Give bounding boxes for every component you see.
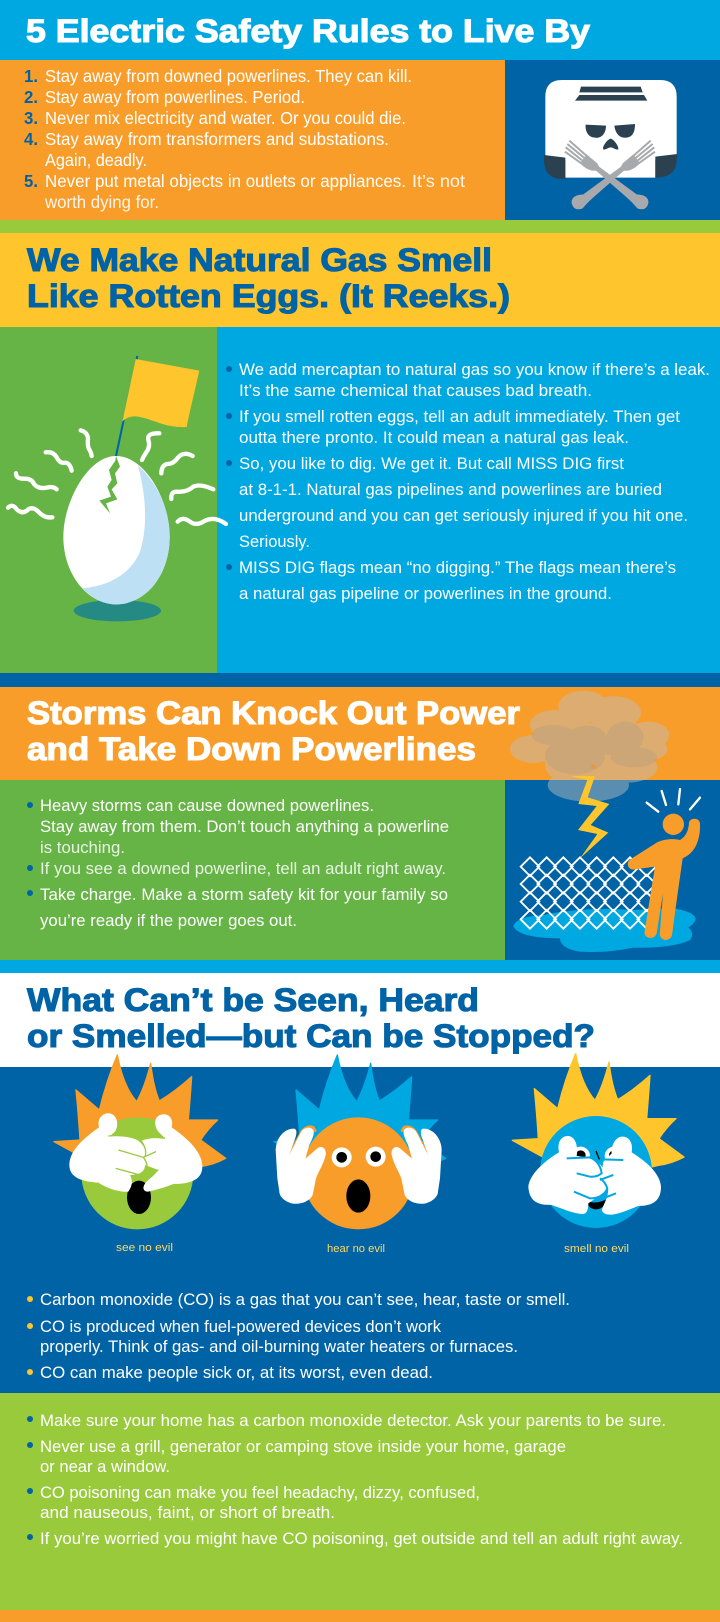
egg shading [83,466,170,604]
spiky hair [512,1054,684,1182]
footer band [0,1610,720,1622]
stink lines [8,430,226,524]
bullet: detector: Make sure your home has a carbon monoxide detector. Ask your parents to be sure. [40,1412,666,1430]
heading: natural gas: Like Rotten Eggs. (It Reeks.) [27,278,510,314]
bullet: call MISS DIG: So, you like to dig. We get it. But call MISS DIG first [239,455,624,473]
heading: carbon monoxide [27,982,595,1054]
heading: carbon monoxide: or Smelled—but Can be Stopped? [27,1018,595,1054]
heading: natural gas [27,242,510,314]
rule 3: Never mix electricity and water. Or you could die. [45,108,406,128]
rule 3: 3. [24,108,38,128]
divider band: green [0,220,720,233]
rule 4: Stay away from transformers and substations. [45,129,389,149]
right hand [602,1137,661,1215]
icon: toaster skull and crossed forks [544,80,677,209]
bullet: symptoms: and nauseous, faint, or short of breath. [40,1504,335,1522]
mouth [346,1179,370,1213]
text block: five safety rules [24,66,465,212]
rule 5: 5. [24,171,38,191]
bullet: call MISS DIG: Seriously. [239,533,310,551]
panel: egg illustration background [0,327,217,673]
panel: carbon monoxide dark section [0,1067,720,1393]
title: 5 Electric Safety Rules to Live By [26,13,590,49]
text block: storm bullets [27,797,449,930]
right hand [142,1114,202,1192]
rule 1: Stay away from downed powerlines. They can kill. [45,66,412,86]
heading: storms: and Take Down Powerlines [27,731,476,767]
bullet: symptoms [27,1484,480,1522]
bullet: fuel-powered devices: properly. Think of gas- and oil-burning water heaters or furnaces. [40,1338,518,1356]
mouth [127,1181,151,1214]
person [628,814,700,940]
egg crack [99,456,120,513]
bullet: rotten eggs: If you smell rotten eggs, tell an adult immediately. Then get [239,408,680,426]
bullet: mercaptan [226,361,710,400]
bullet: tell an adult: If you see a downed powerline, tell an adult right away. [40,860,446,878]
rule 2: 2. [24,87,38,107]
bullet: downed powerlines [27,797,449,857]
panel: storm heading band [0,687,720,780]
illustration: hear no evil face [274,1055,446,1229]
head [81,1117,193,1229]
illustration: smell no evil face [512,1054,684,1228]
spiky hair [54,1055,226,1183]
shock rays [647,789,700,812]
bullet: get outside: If you’re worried you might have CO poisoning, get outside and tell an adult right away. [40,1530,683,1548]
bullet: rotten eggs: outta there pronto. It could mean a natural gas leak. [239,429,629,447]
eyes [332,1147,386,1167]
bullet: call MISS DIG: at 8-1-1. Natural gas pipelines and powerlines are buried [239,481,662,499]
finger lines [108,1136,165,1175]
bullet: flags: MISS DIG flags mean “no digging.” The flags mean there’s [239,559,676,577]
bullet: mercaptan: We add mercaptan to natural gas so you know if there’s a leak. [239,361,710,379]
bullet: downed powerlines: Heavy storms can cause downed powerlines. [40,797,374,815]
bullet: sick or dead: CO can make people sick or, at its worst, even dead. [40,1364,433,1382]
heading: carbon monoxide: What Can’t be Seen, Heard [27,982,479,1018]
bullet: storm safety kit: you’re ready if the power goes out. [40,912,297,930]
bullet: downed powerlines: is touching. [40,839,125,857]
rule 4 [24,129,389,170]
bullet: grill and generator: Never use a grill, generator or camping stove inside your home, garage [40,1438,566,1456]
panel: natural gas text background [217,327,720,673]
bullet: can't see: Carbon monoxide (CO) is a gas that you can’t see, hear, taste or smell. [40,1291,570,1309]
divider band: light blue [0,960,720,973]
panel: storm text background [0,780,505,960]
bullet: fuel-powered devices [27,1318,518,1356]
right hand [392,1128,442,1204]
eyes and nose [571,1147,623,1165]
bullet: downed powerlines: Stay away from them. Don’t touch anything a powerline [40,818,449,836]
head [302,1117,414,1229]
bullet: fuel-powered devices: CO is produced when fuel-powered devices don’t work [40,1318,442,1336]
rule 5: It’s not [412,171,465,191]
panel: title band [0,0,720,60]
illustration: cracked egg with flag [8,356,226,621]
spiky hair [274,1055,446,1183]
bullet: call MISS DIG [226,455,688,551]
panel: carbon monoxide tips section [0,1393,720,1610]
heading: natural gas: We Make Natural Gas Smell [27,242,492,278]
rule 1: 1. [24,66,38,86]
divider band: dark blue [0,673,720,687]
panel: storm illustration background [505,780,720,960]
caption: smell no evil: smell no evil [564,1243,629,1255]
left hand [276,1128,326,1204]
text block: natural gas bullets [226,361,710,603]
rule 2: Stay away from powerlines. Period. [45,87,305,107]
head [540,1116,652,1228]
heading: storms: Storms Can Knock Out Power [27,695,520,731]
rule 5: worth dying for. [44,192,159,212]
finger lines [567,1157,623,1198]
rule 4: Again, deadly. [45,150,147,170]
caption: see no evil: see no evil [116,1242,173,1254]
illustration: storm, fence and person [510,691,700,952]
panel: natural gas heading band [0,233,720,327]
egg [63,456,170,604]
egg shadow [74,600,161,621]
panel: carbon monoxide heading band [0,973,720,1067]
heading: storms [27,695,520,767]
rule 5 [24,171,465,212]
text block: carbon monoxide tips [27,1412,683,1548]
left hand [528,1136,607,1214]
bullet: flags [226,559,676,603]
rule 5: Never put metal objects in outlets or appliances. [45,171,406,191]
bullet: storm safety kit: Take charge. Make a storm safety kit for your family so [40,886,448,904]
panel: rules list background [0,60,505,220]
rule 4: 4. [24,129,38,149]
bullet: rotten eggs [226,408,680,447]
bullet: storm safety kit [27,886,448,930]
text block: carbon monoxide facts [27,1291,570,1382]
puddle [513,908,696,952]
chain-link fence [521,857,656,929]
bullet: symptoms: CO poisoning can make you feel headachy, dizzy, confused, [40,1484,480,1502]
flag [122,359,199,427]
bullet: flags: a natural gas pipeline or powerlines in the ground. [239,585,612,603]
bullet: grill and generator: or near a window. [40,1458,170,1476]
lightning bolt [571,776,609,858]
illustration: see no evil face [54,1055,226,1229]
bullet: call MISS DIG: underground and you can get seriously injured if you hit one. [239,507,688,525]
finger outlines [290,1127,427,1153]
mouth [586,1198,608,1209]
flag pole [116,356,137,456]
caption: hear no evil: hear no evil [327,1243,385,1255]
bullet: grill and generator [27,1438,566,1476]
storm cloud [510,691,669,802]
panel: toaster icon background [505,60,720,220]
left hand [69,1113,146,1192]
bullet: mercaptan: It’s the same chemical that causes bad breath. [239,382,592,400]
